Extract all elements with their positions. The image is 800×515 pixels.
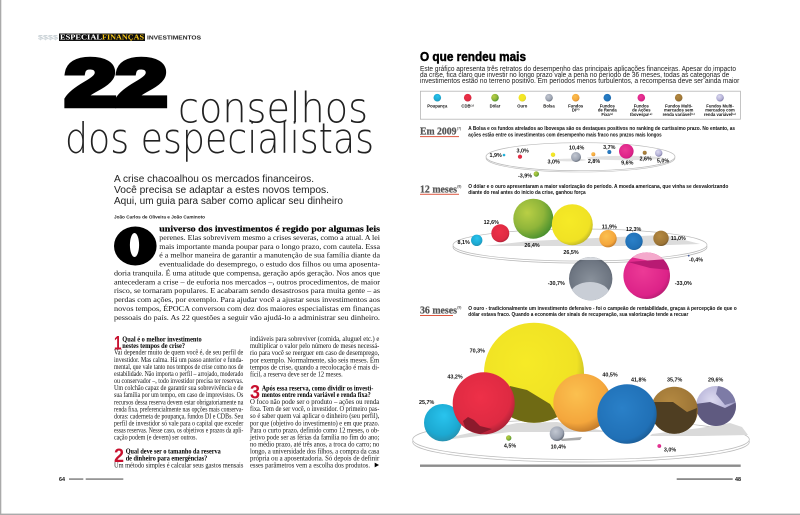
subtitle bbox=[114, 174, 343, 207]
question 1: 1 bbox=[114, 333, 122, 354]
chart: Em 2009: 1,9% bbox=[490, 153, 502, 159]
question 2: tempos de crise, quando a recolocação é mais di- bbox=[250, 363, 380, 371]
heading: 12 meses: 12 meses bbox=[420, 183, 458, 195]
question 2: rio para você se reerguer em caso de desemprego, bbox=[250, 349, 380, 357]
question 1: perfil de investidor só vale para o capital que exceder bbox=[114, 420, 244, 428]
legend: Dólar bbox=[490, 103, 501, 108]
question 1: essas reservas. Nesse caso, os objetivos e prazos da apli- bbox=[114, 427, 244, 435]
heading: 36 meses: (9) bbox=[457, 306, 461, 310]
intro text: eventualidade do desemprego, o estudo dos filhos ou uma aposenta- bbox=[159, 260, 380, 269]
legend: de Renda bbox=[598, 108, 617, 113]
section header bbox=[38, 34, 201, 42]
question 1: Qual é o melhor investimento bbox=[122, 335, 202, 343]
legend: de Ações bbox=[632, 108, 651, 113]
intro text: é a melhor maneira de garantir a manutenção de sua família diante da bbox=[159, 251, 381, 260]
subtitle: Aqui, um guia para saber como aplicar seu dinheiro bbox=[114, 196, 343, 207]
legend: DI⁽²⁾ bbox=[572, 108, 580, 113]
question 3: O foco não pode ser o produto – ações ou renda bbox=[250, 398, 380, 406]
intro text: mais importante manda poupar para o longo prazo, com cautela. Essa bbox=[159, 242, 381, 251]
chart: 36 meses: 10,4% bbox=[551, 444, 566, 450]
question 1: mental, que vale tanto nos tempos de crise como nos de bbox=[114, 363, 243, 371]
question 2: Um método simples é calcular seus gastos mensais bbox=[114, 462, 244, 470]
chart: Em 2009: 3,7% bbox=[603, 145, 616, 151]
section header: ESPECIAL bbox=[60, 34, 102, 42]
question 2: 2 bbox=[114, 445, 124, 467]
question 1: cação podem (e devem) ser outros. bbox=[114, 434, 197, 442]
chart: Em 2009: 9,6% bbox=[621, 160, 634, 166]
arrow: continue bbox=[375, 463, 379, 467]
chart: 36 meses: 35,7% bbox=[667, 377, 683, 383]
question 1: ou conservador –, todo investidor precisa ter reservas. bbox=[114, 377, 244, 385]
subtitle: A crise chacoalhou os mercados financeiros. bbox=[114, 174, 314, 185]
section header: $$$$ bbox=[38, 34, 59, 42]
question 1: renda fixa, preferencialmente nas opções mais conserva- bbox=[114, 405, 244, 413]
legend: Fundos bbox=[634, 103, 650, 108]
question 3: fixa. Tem de ser você, o investidor. O primeiro pas- bbox=[250, 405, 380, 413]
question 1: investidor. Mas calma. Há um passo anterior e funda- bbox=[114, 356, 244, 364]
legend: mercados sem bbox=[664, 108, 694, 113]
legend: CDB⁽¹⁾ bbox=[461, 103, 474, 108]
heading: Em 2009: Em 2009 bbox=[420, 126, 457, 138]
right folio bbox=[677, 477, 741, 483]
chart: 36 meses: 43,2% bbox=[447, 374, 463, 380]
question 3: mentos entre renda variável e renda fixa? bbox=[262, 391, 371, 399]
question 2 bbox=[114, 335, 380, 470]
legend: Fixa⁽³⁾ bbox=[601, 112, 613, 117]
question 3: Para o curto prazo, definido como 12 meses, o ob- bbox=[250, 426, 380, 434]
question 1: Vai depender muito de quem você é, de seu perfil de bbox=[114, 349, 243, 357]
chart: 12 meses: -0,4% bbox=[689, 258, 703, 264]
question 1: sua família por um tempo, em caso de imprevistos. Os bbox=[114, 391, 244, 399]
heading: 12 meses: (8) bbox=[457, 184, 461, 188]
text: 36 meses: dólar estava fraco. Quando a economia der sinais de recuperação, sua valorização tende a recuar bbox=[468, 312, 688, 318]
title: 22 bbox=[65, 46, 167, 120]
question 3: esses parâmetros vem a escolha dos produtos. bbox=[250, 462, 370, 470]
legend: Ouro bbox=[517, 103, 528, 108]
chart: 12 meses: 12,3% bbox=[626, 227, 642, 233]
question 3: longo, a universidade dos filhos, a compra da casa bbox=[250, 448, 380, 456]
chart: 36 meses: 25,7% bbox=[419, 400, 435, 406]
left folio bbox=[59, 477, 123, 483]
chart: 36 meses: 4,5% bbox=[504, 444, 516, 450]
intro text bbox=[114, 224, 381, 322]
question 1: estabilidade. Não importa o perfil – arrojado, moderado bbox=[114, 370, 244, 378]
question 2: de dinheiro para emergências? bbox=[126, 454, 208, 462]
question 3: própria ou a aposentadoria. Só depois de definir bbox=[250, 455, 380, 463]
right folio: 48 bbox=[735, 477, 741, 483]
text: 36 meses bbox=[468, 306, 737, 318]
section header: FINANÇAS bbox=[102, 34, 144, 42]
heading: O que rendeu mais: O que rendeu mais bbox=[420, 50, 526, 64]
title: conselhos bbox=[178, 84, 368, 133]
question 1: Um colchão capaz de garantir sua sobrevivência e de bbox=[114, 384, 243, 392]
chart: 36 meses: 41,8% bbox=[631, 377, 647, 383]
question 2: fícil, a reserva deve ser de 12 meses. bbox=[250, 370, 343, 378]
question 3: no médio prazo, até três anos, a troca do carro; no bbox=[250, 440, 380, 448]
chart: 36 meses: 3,0% bbox=[664, 448, 676, 454]
intro text: doria tranquila. É uma atitude que compensa, geração após geração. Nos anos que bbox=[114, 268, 381, 278]
text: Em 2009: A Bolsa e os fundos atrelados ao Ibovespa são os destaques positivos no ranking de curtíssimo prazo. No entanto, as bbox=[468, 126, 735, 132]
chart: 36 meses: 29,6% bbox=[708, 377, 724, 383]
intro paragraph right: investimentos estão no terreno positivo. Em períodos menos turbulentos, a recompensa deve ser ainda maior bbox=[420, 78, 740, 85]
text: 12 meses: diante do real antes do início da crise, ganhou força bbox=[468, 190, 586, 196]
intro paragraph right bbox=[420, 66, 740, 85]
intro paragraph right: da crise, fica claro que investir no longo prazo vale a pena no período de 36 meses, todas as categorias de bbox=[420, 72, 729, 79]
intro text: universo dos investimentos é regido por algumas leis bbox=[159, 224, 380, 233]
title: dos especialistas bbox=[65, 114, 374, 163]
question 3: jetivo pode ser as férias da família no fim do ano; bbox=[249, 433, 379, 441]
chart: Em 2009: 5,0% bbox=[657, 158, 669, 164]
chart: 12 meses: -33,0% bbox=[675, 281, 692, 287]
question 3: Após essa reserva, como dividir os investi- bbox=[262, 385, 374, 393]
legend: Fundos bbox=[568, 103, 584, 108]
chart: Em 2009: 3,0% bbox=[548, 160, 560, 166]
chart: 12 meses: 11,9% bbox=[602, 225, 617, 231]
intro text: antecederam a crise – de euforia nos mercados –, outros procedimentos, de maior bbox=[114, 277, 381, 286]
chart: 36 meses: 70,3% bbox=[470, 348, 485, 354]
legend: Ibovespa⁽⁴⁾ bbox=[630, 112, 652, 117]
chart: 36 meses: 40,5% bbox=[602, 373, 618, 379]
chart: 12 meses: 26,5% bbox=[563, 250, 579, 256]
chart: Em 2009: 3,0% bbox=[517, 149, 529, 155]
chart: 12 meses bbox=[453, 199, 707, 308]
intro text: pessoais do país. As 22 questões a seguir vão ajudá-lo a administrar seu dinheiro. bbox=[114, 313, 380, 322]
question 1: nestes tempos de crise? bbox=[122, 342, 185, 350]
question 2: indiáveis para sobreviver (comida, aluguel etc.) e bbox=[250, 335, 379, 343]
section header: INVESTIMENTOS bbox=[147, 35, 201, 41]
intro text: novos tempos, ÉPOCA conversou com dez dos maiores especialistas em finanças bbox=[114, 303, 380, 313]
legend: renda variável⁽⁵⁾ bbox=[663, 112, 695, 117]
question 3: 3 bbox=[250, 381, 260, 403]
legend: Poupança bbox=[427, 103, 448, 108]
left folio: 64 bbox=[59, 477, 65, 483]
question 3: so é saber quem vai aplicar o dinheiro (seu perfil), bbox=[250, 412, 380, 420]
chart: 12 meses: 11,0% bbox=[671, 236, 686, 242]
intro text: perenes. Elas sobrevivem mesmo a crises severas, como a atual. A lei bbox=[159, 233, 380, 242]
heading: 36 meses: 36 meses bbox=[420, 304, 458, 316]
question 1: recursos dessa reserva devem estar obrigatoriamente na bbox=[114, 398, 244, 406]
subtitle: Você precisa se adaptar a estes novos tempos. bbox=[114, 185, 329, 196]
question 1 bbox=[114, 333, 244, 442]
text: 12 meses bbox=[468, 184, 728, 196]
drop cap O bbox=[114, 226, 157, 266]
legend: Fundos bbox=[600, 103, 616, 108]
question 3: por que (objetivo do investimento) e em que prazo. bbox=[250, 419, 380, 427]
legend: Bolsa bbox=[543, 103, 555, 108]
bottom rule bbox=[420, 464, 741, 467]
intro paragraph right: Este gráfico apresenta três retratos do desempenho das principais aplicações financeiras. Apesar do impacto bbox=[420, 66, 736, 73]
text: Em 2009 bbox=[468, 126, 735, 138]
chart: 12 meses: 26,4% bbox=[524, 243, 540, 249]
title bbox=[65, 46, 374, 163]
chart: 12 meses: -30,7% bbox=[548, 281, 565, 287]
chart: 12 meses: 12,6% bbox=[484, 220, 499, 226]
question 2: por exemplo. Normalmente, são seis meses. Em bbox=[250, 356, 380, 364]
byline: João Carlos de Oliveira e João Caminoto bbox=[114, 215, 205, 221]
intro text: perdas com ações, por exemplo. Para ajudar você a ajustar seus investimentos aos bbox=[114, 295, 380, 304]
question 1: doras: caderneta de poupança, fundos DI e CDBs. Seu bbox=[114, 412, 244, 420]
question 3 bbox=[249, 381, 380, 470]
chart: Em 2009: 2,8% bbox=[588, 159, 600, 165]
text: Em 2009: ações estão entre os investimentos com desempenho mais fraco nos prazos mais longos bbox=[468, 132, 662, 138]
legend: renda variável⁽⁶⁾ bbox=[704, 112, 736, 117]
chart: Em 2009 bbox=[486, 143, 675, 179]
legend: mercados com bbox=[705, 108, 735, 113]
chart: 36 meses bbox=[413, 323, 749, 462]
legend: Fundos Multi- bbox=[706, 103, 734, 108]
legend bbox=[420, 91, 740, 119]
legend: Fundos Multi- bbox=[665, 103, 693, 108]
chart: 12 meses: 8,1% bbox=[458, 240, 470, 246]
question 2: Qual deve ser o tamanho da reserva bbox=[126, 448, 221, 456]
question 2: multiplicar o valor pelo número de meses necessá- bbox=[250, 342, 380, 350]
chart: Em 2009: 2,6% bbox=[640, 156, 652, 162]
chart: Em 2009: -3,9% bbox=[518, 173, 532, 179]
text: 12 meses: O dólar e o ouro apresentaram a maior valorização do período. A moeda americana, que vinha se desvalorizando bbox=[468, 184, 728, 190]
chart: Em 2009: 10,4% bbox=[569, 146, 585, 152]
heading: Em 2009: (7) bbox=[457, 126, 461, 130]
text: 36 meses: O ouro - tradicionalmente um investimento defensivo - foi o campeão de rentabilidade, graças à percepção de que o bbox=[468, 306, 737, 312]
intro text: risco, se tornaram populares. E acabaram sendo desastrosos para muita gente – as bbox=[114, 286, 380, 295]
